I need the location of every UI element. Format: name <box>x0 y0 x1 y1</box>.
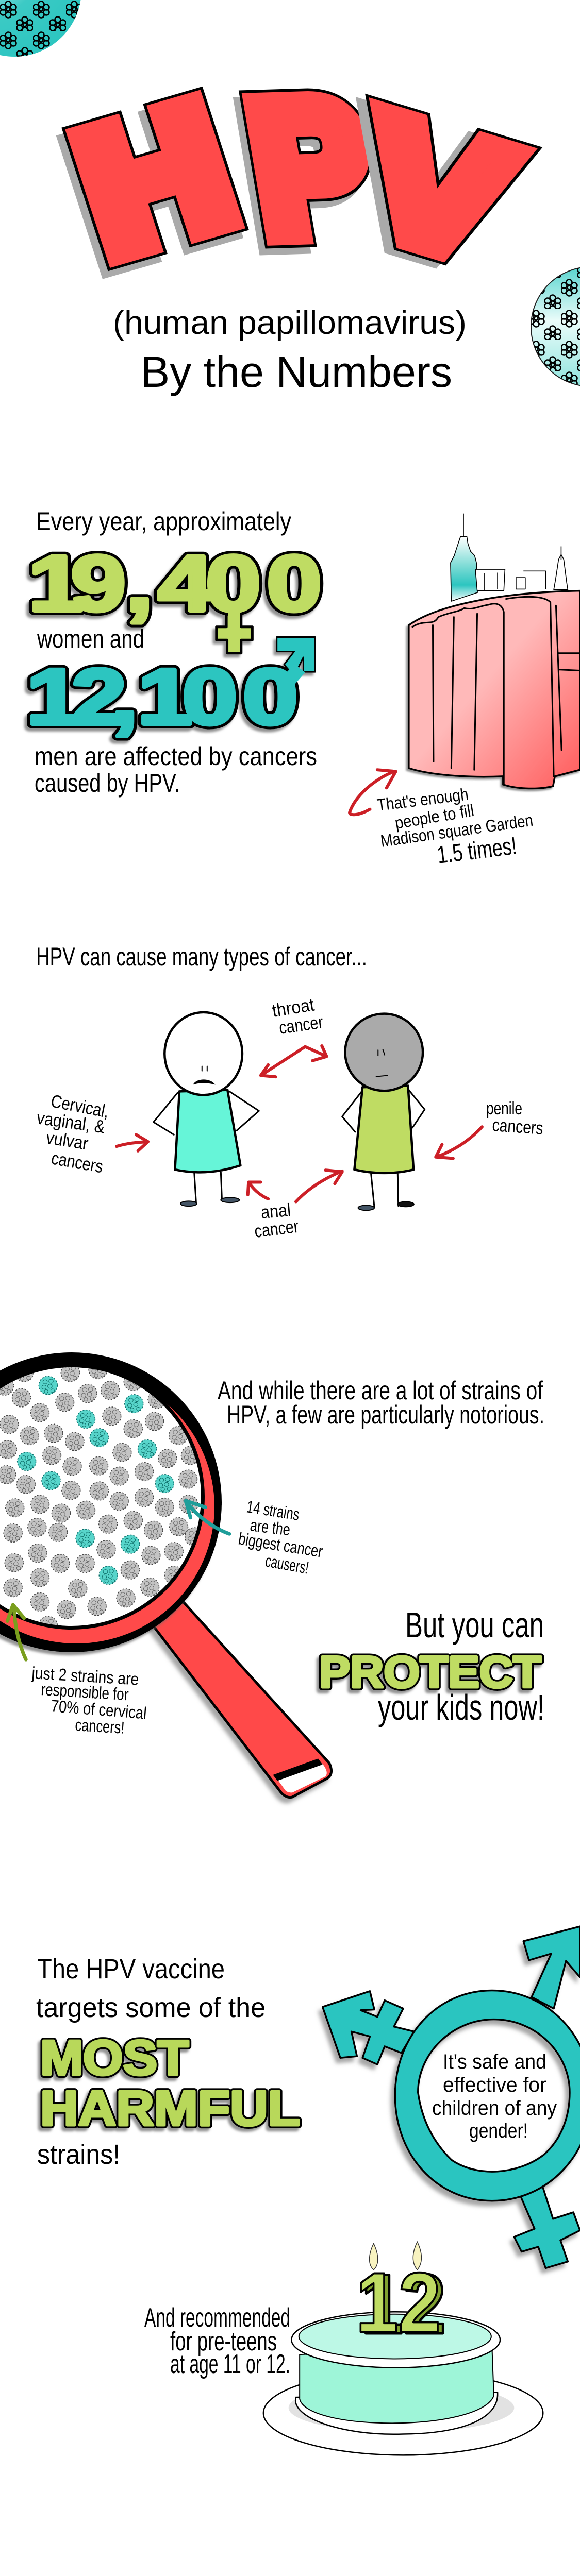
callout: madison square garden: That's enough <box>376 785 470 815</box>
heading: MOST HARMFUL: HARMFUL <box>40 2081 300 2136</box>
callout: 14 strains <box>237 1497 324 1578</box>
text: vaccine targets: The HPV vaccine <box>37 1954 225 1985</box>
title letter V: V <box>338 81 518 303</box>
illustration: magnifying glass <box>0 1352 332 1798</box>
text: safe and effective: gender! <box>469 2120 528 2142</box>
icon: virus top left <box>0 0 81 57</box>
title letter P: P <box>237 61 385 273</box>
icon: female symbol stem <box>217 605 252 653</box>
arrow: red to arena <box>350 770 396 815</box>
callout: 14 strains: 14 strains <box>245 1497 301 1524</box>
candle flames <box>370 2242 421 2270</box>
virus strains <box>0 1361 204 1635</box>
callout: just 2 strains: responsible for <box>41 1680 129 1704</box>
figure: left person <box>154 1012 259 1206</box>
title letter V: V <box>347 78 527 299</box>
callout: 14 strains: biggest cancer <box>237 1529 324 1561</box>
icon: male symbol arrow <box>277 637 315 676</box>
stat: 19,400 women: 19,400 <box>28 539 322 628</box>
callout: madison square garden: 1.5 times! <box>436 832 518 869</box>
labels: cancer types: cancer <box>253 1216 300 1242</box>
text: recommended for preteens <box>144 2303 290 2379</box>
top frosting <box>291 2312 500 2368</box>
labels: cancer types: throat <box>271 995 316 1021</box>
text: men are affected <box>35 742 317 798</box>
title letter V: V <box>347 78 527 299</box>
plate <box>263 2371 543 2455</box>
text: men are affected: caused by HPV. <box>35 769 180 798</box>
callout: madison square garden: people to fill <box>393 801 475 833</box>
figure: right person <box>342 1014 425 1210</box>
callout: 14 strains: are the <box>249 1515 291 1539</box>
text: safe and effective: children of any <box>432 2097 557 2120</box>
heading: PROTECT: PROTECT <box>319 1648 541 1697</box>
callout: madison square garden: Madison square Garden <box>379 810 534 851</box>
callout: just 2 strains <box>31 1663 147 1737</box>
arrows: cancer types <box>117 1046 482 1201</box>
callout: just 2 strains: just 2 strains are <box>31 1663 139 1689</box>
labels: cancer types <box>36 995 544 1242</box>
heading: PROTECT: PROTECT <box>319 1648 541 1697</box>
text: safe and effective: It's safe and <box>443 2050 546 2073</box>
arrow: teal to strains <box>186 1501 229 1534</box>
stat: 19,400 women: 19,400 <box>28 539 322 628</box>
icon: transgender symbol <box>323 1926 580 2268</box>
text: strains notorious <box>218 1376 544 1429</box>
bottom frosting <box>295 2393 498 2434</box>
text: men are affected: men are affected by cancers <box>35 742 317 771</box>
text: strains: strains! <box>37 2139 120 2170</box>
text: every year: Every year, approximately <box>36 507 291 536</box>
text: recommended for preteens: And recommended <box>144 2303 290 2333</box>
heading: MOST HARMFUL <box>40 2030 300 2136</box>
labels: cancer types: cancer <box>278 1012 325 1038</box>
callout: just 2 strains: 70% of cervical <box>50 1696 147 1723</box>
icon: virus right <box>531 267 580 386</box>
text: women and: women and <box>37 624 144 653</box>
title letter H: H <box>54 75 246 298</box>
illustration: birthday cake: 12 <box>356 2255 441 2350</box>
subtitle: human papillomavirus: (human papillomavirus) <box>113 304 467 341</box>
heading: types of cancer: HPV can cause many types of cancer... <box>36 942 367 971</box>
text: vaccine targets <box>36 1954 266 2023</box>
arena body <box>409 591 580 789</box>
labels: cancer types: vulvar <box>45 1127 90 1154</box>
buildings <box>451 514 568 601</box>
illustration: birthday cake <box>263 2242 543 2455</box>
labels: cancer types: cancers <box>491 1115 544 1139</box>
title: HPV <box>52 61 527 305</box>
title letter H: H <box>59 67 252 291</box>
subtitle: by the numbers: By the Numbers <box>141 348 452 396</box>
title letter H: H <box>59 67 252 291</box>
heading: MOST HARMFUL: HARMFUL <box>40 2081 300 2136</box>
labels: cancer types: vaginal, & <box>36 1108 106 1137</box>
labels: cancer types: anal <box>260 1200 291 1223</box>
stat: 12,100 men: 12,100 <box>26 652 298 741</box>
labels: cancer types: penile <box>486 1098 522 1118</box>
callout: just 2 strains: cancers! <box>75 1715 125 1737</box>
callout: madison square garden <box>376 785 534 869</box>
labels: cancer types: Cervical, <box>49 1091 111 1122</box>
arrow: green to strains <box>7 1605 26 1659</box>
candles 12: 12 <box>361 2257 446 2351</box>
title letter P: P <box>237 61 385 273</box>
text: recommended for preteens: at age 11 or 12. <box>170 2349 290 2379</box>
illustration: Madison Square Garden <box>409 514 580 789</box>
text: safe and effective <box>432 2050 557 2142</box>
title letter P: P <box>231 68 379 280</box>
text: vaccine targets: targets some of the <box>36 1992 266 2023</box>
text: recommended for preteens: for pre-teens <box>170 2327 277 2357</box>
lens rings <box>0 1352 222 1652</box>
heading: MOST HARMFUL: MOST <box>40 2030 189 2086</box>
labels: cancer types: cancers <box>50 1148 105 1177</box>
cake side <box>300 2346 494 2423</box>
heading: MOST HARMFUL: MOST <box>40 2030 189 2086</box>
text: safe and effective: effective for <box>443 2074 546 2096</box>
stat: 12,100 men: 12,100 <box>26 652 298 741</box>
callout: 14 strains: causers! <box>264 1551 310 1578</box>
handle <box>146 1591 332 1798</box>
